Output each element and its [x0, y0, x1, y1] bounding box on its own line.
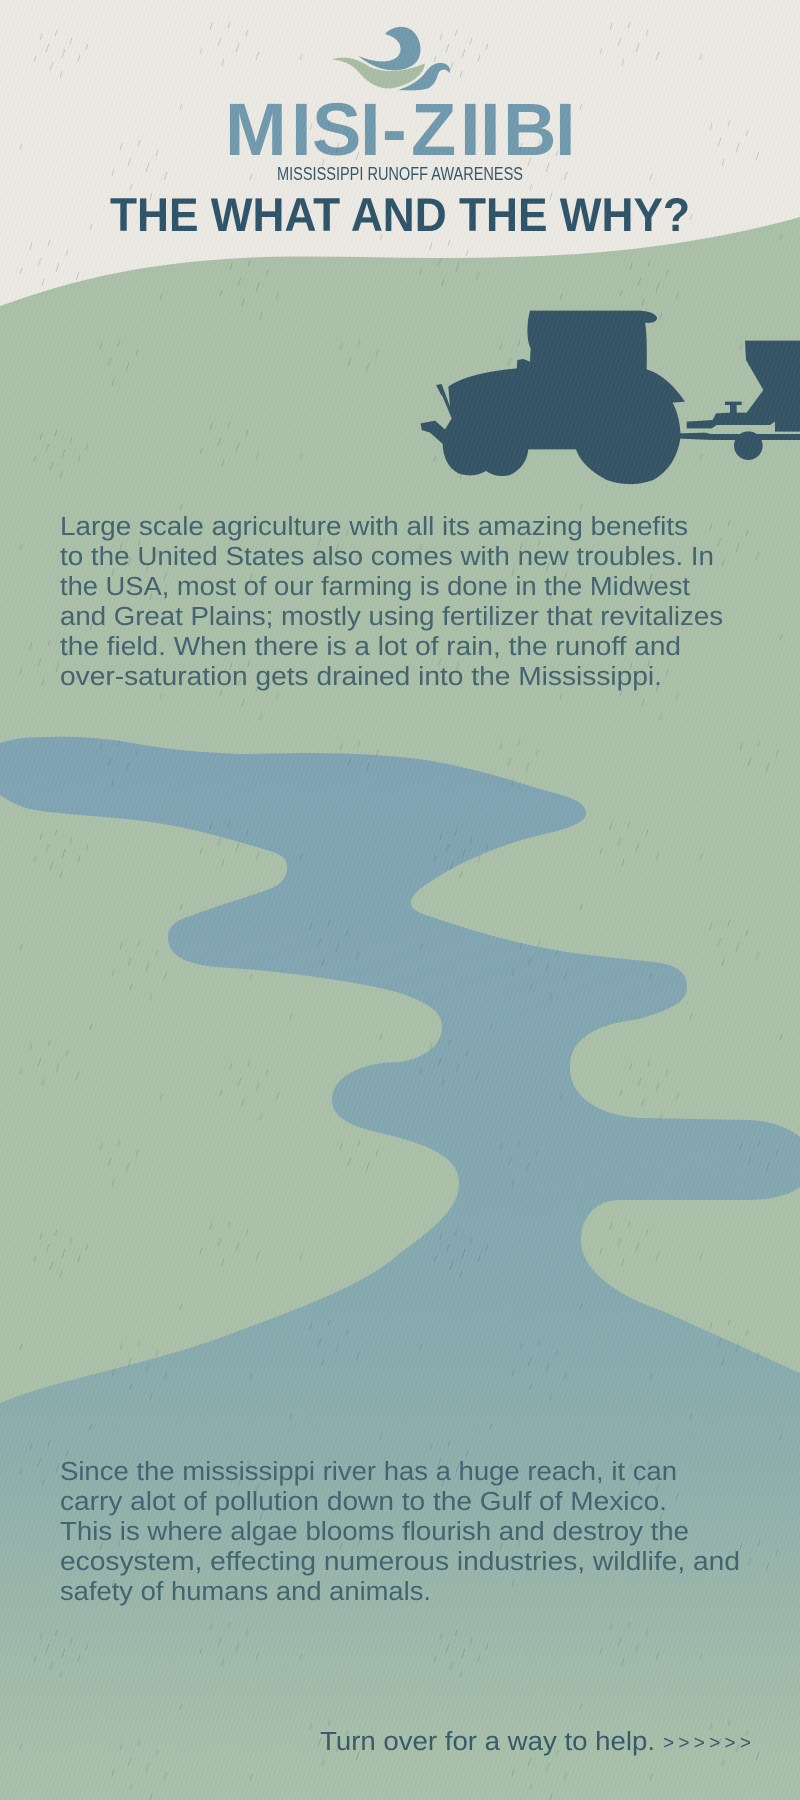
text block: pollution reaching the Gulf: ecosystem, effecting numerous industries, wildlife, and	[60, 1548, 740, 1576]
text block: agriculture and fertilizer: over-saturation gets drained into the Mississippi.	[60, 663, 662, 691]
text block: agriculture and fertilizer: to the United States also comes with new troubles. In	[60, 543, 714, 571]
spreader hopper and drawbar	[687, 341, 800, 432]
river and gulf	[0, 737, 800, 1800]
green wave	[332, 58, 425, 88]
header: logo and title	[110, 27, 690, 241]
large blue wave	[358, 27, 420, 70]
spreader wheel	[734, 431, 763, 460]
title: THE WHAT AND THE WHY?	[110, 188, 690, 241]
tagline: MISSISSIPPI RUNOFF AWARENESS	[277, 164, 523, 184]
call to action: turn over: >>>>>>	[663, 1733, 751, 1754]
small blue wave	[398, 63, 450, 90]
lower hitch bar	[679, 433, 800, 440]
text block: agriculture and fertilizer: and Great Plains; mostly using fertilizer that revitalizes	[60, 603, 723, 631]
call to action: turn over: Turn over for a way to help.	[320, 1728, 655, 1756]
text block: pollution reaching the Gulf: Since the mississippi river has a huge reach, it can	[60, 1458, 677, 1486]
text block: agriculture and fertilizer: Large scale agriculture with all its amazing benefits	[60, 513, 688, 541]
text block: agriculture and fertilizer: the USA, most of our farming is done in the Midwest	[60, 573, 690, 601]
tractor silhouette	[421, 311, 685, 484]
text block: agriculture and fertilizer: the field. When there is a lot of rain, the runoff and	[60, 633, 681, 661]
text block: pollution reaching the Gulf: This is where algae blooms flourish and destroy the	[60, 1518, 689, 1546]
logo wordmark: MISI-ZIIBI	[225, 88, 576, 171]
text block: pollution reaching the Gulf: safety of humans and animals.	[60, 1578, 431, 1606]
text block: agriculture and fertilizer	[60, 513, 723, 691]
text block: pollution reaching the Gulf: carry alot of pollution down to the Gulf of Mexico.	[60, 1488, 667, 1516]
logo: wave icon	[332, 27, 450, 90]
icon: tractor with fertilizer spreader	[421, 311, 800, 484]
text block: pollution reaching the Gulf	[60, 1458, 740, 1606]
